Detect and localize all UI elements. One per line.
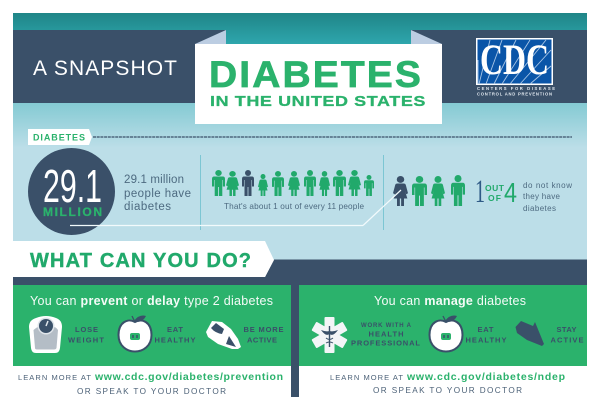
top teal background <box>13 13 587 44</box>
title ribbon folds <box>195 30 442 44</box>
text: do not know they have diabetes <box>523 181 572 213</box>
label: work with a health professional: PROFESSIONAL <box>351 338 420 348</box>
text: do not know they have diabetes: they have <box>523 192 561 201</box>
banner: what can you do <box>13 241 274 277</box>
stat: 1 out of 4: 4 <box>504 177 517 208</box>
text: do not know they have diabetes: diabetes <box>523 204 556 213</box>
pictogram: 1 out of 11 people <box>212 170 374 196</box>
label: work with a health professional: HEALTH <box>368 330 404 338</box>
stat: 1 out of 4: OF <box>488 193 501 203</box>
stat: 1 out of 4 <box>475 174 517 210</box>
subtitle: IN THE UNITED STATES <box>210 93 426 110</box>
label: be more active: ACTIVE <box>247 336 277 344</box>
light blue panel: statistics background <box>13 103 587 148</box>
title box <box>195 44 442 124</box>
footer left: learn more: LEARN MORE AT <box>18 373 91 382</box>
text: 29.1 million people have diabetes: diabetes <box>124 201 171 213</box>
icon: apple <box>118 316 152 352</box>
footer left: learn more: www.cdc.gov/diabetes/prevention <box>94 371 283 383</box>
text: 29.1 million people have diabetes: people have <box>124 188 191 200</box>
divider between panels <box>291 285 299 397</box>
light blue panel lower <box>13 147 587 262</box>
label: lose weight: WEIGHT <box>68 336 104 344</box>
text: 29.1 million people have diabetes: 29.1 million <box>124 174 184 186</box>
CDC logo <box>476 37 555 96</box>
footer left: learn more <box>18 371 283 396</box>
icon: dark shoe <box>516 321 544 346</box>
stat circle: 29.1 million: 29.1 <box>43 160 102 212</box>
caption: 1 out of every 11 people: That's about 1 out of every 11 people <box>224 202 364 211</box>
CDC logo: CDC <box>480 37 549 84</box>
icon: apple <box>430 316 462 352</box>
section tag: diabetes: DIABETES <box>33 132 85 142</box>
label: eat healthy <box>154 325 196 344</box>
label: be more active <box>244 325 284 344</box>
connector line <box>70 224 363 226</box>
label: eat healthy: HEALTHY <box>466 336 506 344</box>
footer right: learn more <box>330 371 565 395</box>
footer left: learn more: OR SPEAK TO YOUR DOCTOR <box>77 387 226 396</box>
connector line end <box>363 190 401 226</box>
label: stay active: STAY <box>556 325 576 334</box>
stat: 1 out of 4: 1 <box>475 174 485 210</box>
panel heading: You can manage diabetes <box>374 294 526 308</box>
label: lose weight: LOSE <box>75 325 98 334</box>
label: stay active <box>550 325 584 344</box>
label: work with a health professional: WORK WITH A <box>361 323 412 329</box>
icon: scale <box>29 316 62 353</box>
text: 29.1 million people have diabetes <box>124 174 191 213</box>
label: eat healthy <box>466 325 506 344</box>
stat circle: 29.1 million: MILLION <box>43 205 102 219</box>
CDC logo: CONTROL AND PREVENTION <box>477 92 552 96</box>
icon: shoe <box>206 321 241 349</box>
section tag: diabetes <box>28 129 92 145</box>
title: diabetes: DIABETES <box>209 54 423 95</box>
CDC logo: CENTERS FOR DISEASE <box>477 86 555 91</box>
dark band behind action panels <box>13 260 587 285</box>
footer right: learn more: www.cdc.gov/diabetes/ndep <box>406 371 565 383</box>
panel heading: You can prevent or delay type 2 diabetes <box>30 294 273 308</box>
label: be more active: BE MORE <box>244 325 284 334</box>
header band right <box>411 30 587 103</box>
panel: manage diabetes <box>299 285 587 366</box>
label: eat healthy: HEALTHY <box>154 336 196 344</box>
stat circle: 29.1 million <box>28 148 115 235</box>
label: work with a health professional <box>351 323 420 348</box>
banner: what can you do: WHAT CAN YOU DO? <box>30 250 251 272</box>
label: stay active: ACTIVE <box>550 336 584 344</box>
header band left <box>13 30 226 103</box>
footer right: learn more: OR SPEAK TO YOUR DOCTOR <box>373 386 522 395</box>
label: lose weight <box>68 325 104 344</box>
label: eat healthy: EAT <box>478 325 494 334</box>
pictogram: 1 out of 4 <box>393 175 465 206</box>
heading: a snapshot: A SNAPSHOT <box>33 57 177 80</box>
text: do not know they have diabetes: do not know <box>523 181 572 190</box>
panel: prevent or delay <box>13 285 291 366</box>
dashed divider <box>93 136 572 138</box>
footer right: learn more: LEARN MORE AT <box>330 373 403 382</box>
icon: medical star <box>311 317 348 353</box>
stat: 1 out of 4: OUT <box>485 183 505 193</box>
label: eat healthy: EAT <box>167 325 183 334</box>
